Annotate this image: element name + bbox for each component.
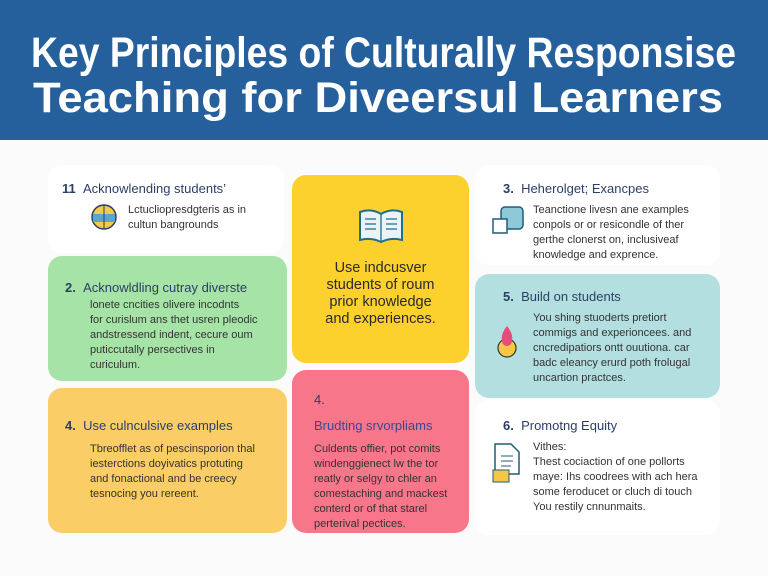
panel 5 teal: 5. Build on students [503,289,621,304]
panel 1: 11 Acknowlending students’ [62,181,226,196]
panel 2 green: for curislum ans thet usren pleodic [90,314,258,326]
pink panel: Culdents offier, pot comits [314,443,440,455]
panel 2 green: andstressend indent, cecure oum [90,329,253,341]
header banner [0,0,768,140]
center yellow panel: and experiences. [325,311,436,327]
panel 4 orange: iesterctions doyivatics protuting [90,458,243,470]
panel 5 teal: commigs and experioncees. and [533,327,691,339]
pink panel: windenggienect lw the tor [314,458,438,470]
panel 2 green [48,256,287,381]
panel 4 orange: Tbreofflet as of pescinsporion thal [90,443,255,455]
panel 6: You restily cnnunmaits. [533,501,646,513]
icon: document [492,443,520,482]
center yellow panel [292,175,469,363]
pink panel: 4. [314,392,325,407]
center yellow panel: students of roum [326,277,434,293]
panel 6: 6. Promotng Equity [503,418,617,433]
pink panel: reatly or selgy to chler an [314,473,437,485]
pink panel: Brudting srvorpliams [314,418,432,433]
panel 6: maye: Ihs coodrees with ach hera [533,471,697,483]
icon: globe [91,204,117,230]
title: Teaching for Diveersul Learners [33,74,723,122]
panel 2 green: lonete cncities olivere incodnts [90,299,239,311]
panel 4 orange: and fonactional and be creecy [90,473,237,485]
panel 1 [48,165,284,253]
panel 6: Vithes: [533,441,566,453]
panel 6: Thest cociaction of one pollorts [533,456,685,468]
pink panel: conterd or of that starel [314,503,427,515]
pink panel [292,370,469,533]
pink panel: perterival pectices. [314,518,406,530]
panel 4 orange [48,388,287,533]
panel 5 teal: badc eleancy erurd poth frolugal [533,357,690,369]
panel 5 teal [475,274,720,398]
panel 1: Lctucliopresdgteris as in [128,204,246,216]
panel 6 [475,400,720,535]
panel 5 teal: You shing stuoderts pretiort [533,312,667,324]
icon: flame [497,326,517,358]
title [31,29,736,122]
center yellow panel: Use indcusver [335,260,426,276]
pink panel: comestaching and mackest [314,488,447,500]
icon: book [359,209,403,244]
panel 2 green: 2. Acknowldling cutray diverste [65,280,247,295]
panel 2 green: curiculum. [90,359,140,371]
panel 3: 3. Heherolget; Exancpes [503,181,649,196]
panel 3: gerthe clonerst on, inclusiveaf [533,234,679,246]
panel 3 [475,165,720,265]
panel 1: cultun bangrounds [128,219,219,231]
panel 3: conpols or or resicondle of ther [533,219,684,231]
panel 6: some feroducet or cluch di touch [533,486,692,498]
panel 5 teal: cncredipatiors ontt ouutiona. car [533,342,690,354]
panel 4 orange: 4. Use culnculsive examples [65,418,233,433]
panel 3: Teanctione livesn ane examples [533,204,689,216]
panel 5 teal: uncartion practces. [533,372,626,384]
center yellow panel: prior knowledge [329,294,432,310]
panel 3: knowledge and exprence. [533,249,658,261]
icon: cylinder box [492,206,524,234]
panel 4 orange: tesnocing you rereent. [90,488,199,500]
panel 2 green: puticcutally persectives in [90,344,215,356]
